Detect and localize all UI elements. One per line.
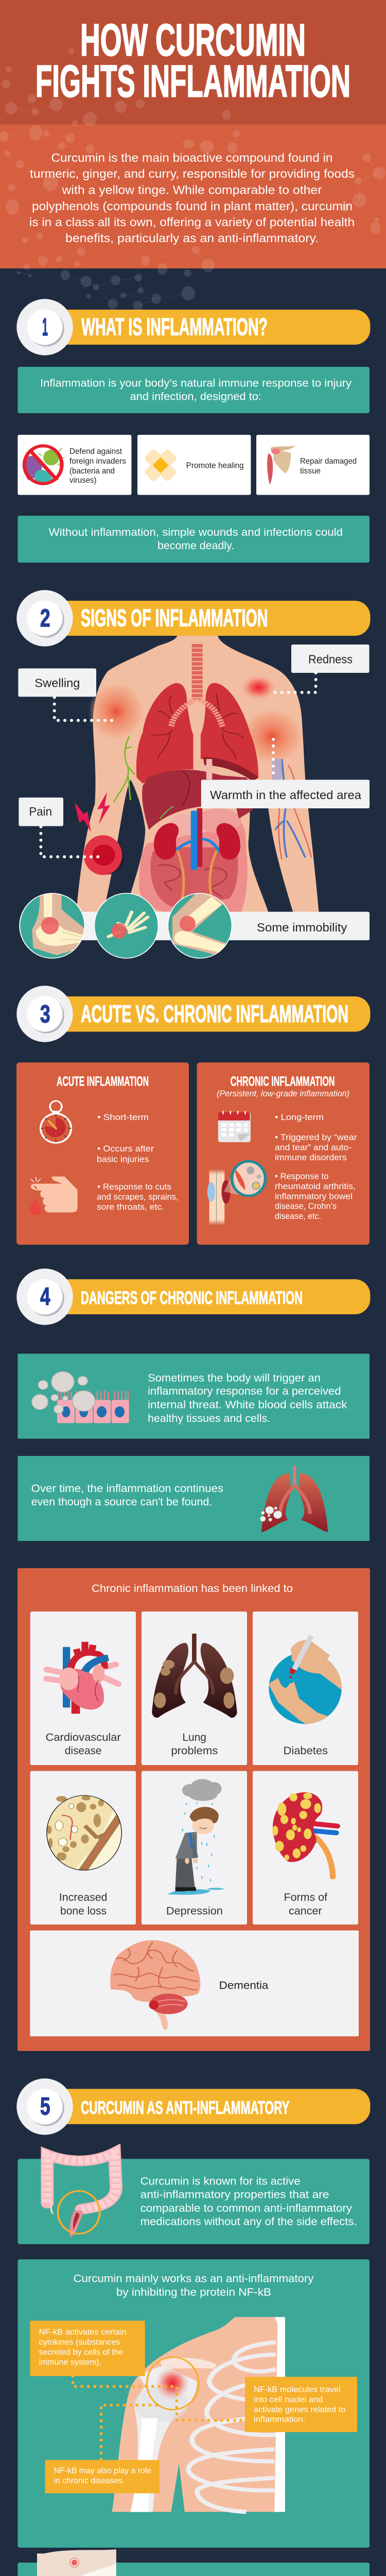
lightning bolts xyxy=(75,792,110,833)
callout: activates cytokines: secreted by cells of the xyxy=(39,2348,124,2357)
esophagus xyxy=(206,759,212,779)
stomach xyxy=(197,808,241,833)
arrows: dotted connectors xyxy=(73,2376,245,2460)
panel: without inflammation xyxy=(17,516,370,563)
callout: activates cytokines: immune system). xyxy=(39,2358,101,2367)
card: cardiovascular disease: disease xyxy=(65,1745,102,1757)
panel: inflammation definition: and infection, designed to: xyxy=(130,391,261,403)
section 5 header: 5 xyxy=(40,2093,50,2121)
panel: curcumin anti-inflammatory properties: comparable to common anti-inflammatory xyxy=(141,2202,353,2214)
panel: chronic inflammation: • Response to xyxy=(275,1172,328,1181)
label: pain xyxy=(19,798,63,826)
callout: chronic diseases: NF-kB may also play a role xyxy=(54,2466,151,2475)
icon: kidney tumor xyxy=(272,1792,337,1877)
panel: acute inflammation: sore throats, etc. xyxy=(97,1202,164,1212)
icon: calendar xyxy=(218,1111,251,1142)
card: forms of cancer: Forms of xyxy=(284,1891,327,1903)
intro text: polyphenols (compounds found in plant matter), curcumin xyxy=(32,199,353,213)
panel: chronic inflammation: • Long-term xyxy=(275,1113,324,1122)
card: increased bone loss xyxy=(30,1771,136,1925)
panel: enzymes xyxy=(17,2549,370,2576)
section 2 header: 2 xyxy=(40,605,50,632)
card: repair tissue: tissue xyxy=(300,467,321,476)
callout: cell nuclei: activate genes related to xyxy=(254,2405,346,2414)
card: depression: Depression xyxy=(166,1905,223,1917)
label: swelling: Swelling xyxy=(34,676,80,690)
section 2 header xyxy=(16,590,370,647)
lungs xyxy=(136,683,193,784)
card: cardiovascular disease xyxy=(30,1612,136,1765)
icon: sad man under rain xyxy=(167,1779,224,1895)
card: diabetes: Diabetes xyxy=(283,1745,328,1757)
icon: colon xyxy=(47,2153,116,2238)
card: increased bone loss: Increased xyxy=(59,1891,107,1903)
icon: bandage xyxy=(144,448,178,482)
callout: cell nuclei: into cell nuclei and xyxy=(254,2395,323,2404)
kidneys xyxy=(154,823,179,860)
card: increased bone loss: bone loss xyxy=(60,1905,107,1917)
warmth spot xyxy=(241,709,303,764)
card: repair tissue: Repair damaged xyxy=(300,457,357,466)
callout: chronic diseases xyxy=(45,2460,160,2493)
intro band xyxy=(0,125,386,268)
card: promote healing: Promote healing xyxy=(186,461,244,470)
arm veins xyxy=(276,759,305,858)
panel: chronic inflammation: • Triggered by “wear xyxy=(275,1133,357,1142)
intro text: benefits, particularly as an anti-inflammatory. xyxy=(65,231,319,245)
label: warmth xyxy=(201,780,370,808)
illustration: shoulder and rib cage xyxy=(112,2317,285,2512)
card: dementia xyxy=(30,1930,359,2036)
section 3 header xyxy=(16,986,370,1042)
label: pain: Pain xyxy=(29,805,52,818)
callout: cell nuclei: inflammation. xyxy=(254,2415,306,2424)
panel: inflammation continues: even though a source can't be found. xyxy=(31,1496,212,1508)
trachea xyxy=(186,644,208,700)
panel: acute inflammation: • Response to cuts xyxy=(97,1182,171,1192)
callout: activates cytokines xyxy=(30,2320,145,2376)
panel: acute inflammation: • Short-term xyxy=(97,1113,149,1122)
swelling spot xyxy=(89,683,144,740)
icon: white blood cells attacking xyxy=(32,1371,129,1423)
icon: inflamed lungs xyxy=(260,1466,328,1532)
intro text: is in a class all its own, offering a variety of potential health xyxy=(29,215,355,229)
panel: chronic inflammation: immune disorders xyxy=(275,1153,347,1162)
panel: NF-kB mechanism: Curcumin mainly works as an anti-inflammatory xyxy=(73,2273,314,2285)
panel: chronic inflammation linked conditions xyxy=(17,1568,370,2051)
panel: curcumin anti-inflammatory properties xyxy=(17,2153,370,2244)
molecule pattern: top xyxy=(0,48,385,311)
panel: inflammation continues: Over time, the inflammation continues xyxy=(31,1483,223,1495)
card: defend against invaders: (bacteria and xyxy=(69,467,115,476)
callout: cell nuclei: NF-kB molecules travel xyxy=(254,2385,341,2394)
card: diabetes xyxy=(253,1612,358,1765)
section 1 header xyxy=(16,299,370,355)
arrow: redness xyxy=(274,673,316,692)
intestines xyxy=(139,819,248,912)
panel: chronic inflammation: inflammatory bowel xyxy=(275,1192,353,1201)
panel: chronic inflammation: rheumatoid arthritis, xyxy=(275,1182,356,1191)
callout: activates cytokines: cytokines (substances xyxy=(39,2338,120,2347)
green nerve xyxy=(114,736,135,802)
card: forms of cancer xyxy=(253,1771,358,1925)
icon: ankle joint xyxy=(20,892,86,958)
section 4 header xyxy=(16,1268,370,1325)
intro text: turmeric, ginger, and curry, responsible for providing foods xyxy=(30,167,355,180)
card: dementia: Dementia xyxy=(219,1979,269,1991)
panel: chronic inflammation: disease, Crohn’s xyxy=(275,1201,337,1211)
label: redness: Redness xyxy=(308,652,353,666)
label: some immobility: Some immobility xyxy=(257,921,347,934)
icon: porous bone xyxy=(47,1795,126,1875)
label: redness xyxy=(291,645,370,673)
inflammation spot xyxy=(154,2366,190,2401)
icon: cut finger xyxy=(29,1177,78,1215)
section 3 header: 3 xyxy=(40,1001,50,1028)
icon: shoulder xyxy=(267,446,295,484)
illustration: human body with organs xyxy=(75,636,319,912)
panel: chronic inflammation xyxy=(197,1062,370,1245)
panel: inflammation continues xyxy=(17,1456,370,1541)
label: some immobility xyxy=(72,912,370,940)
title band xyxy=(0,0,386,125)
card: depression xyxy=(142,1771,247,1925)
redness spot xyxy=(239,674,278,701)
icon: wrist joint xyxy=(94,893,159,958)
ureters xyxy=(177,851,217,901)
panel: body attacks healthy tissue: inflammatory response for a perceived xyxy=(148,1385,341,1397)
panel: body attacks healthy tissue: internal threat. White blood cells attack xyxy=(148,1399,347,1411)
panel: body attacks healthy tissue: healthy tissues and cells. xyxy=(148,1413,270,1425)
intro text xyxy=(29,151,355,245)
panel: chronic inflammation linked conditions: Chronic inflammation has been linked to xyxy=(92,1583,293,1595)
panel: NF-kB mechanism: by inhibiting the protein NF-kB xyxy=(116,2286,271,2298)
icon: stopwatch xyxy=(41,1101,72,1143)
icon: knee inflammation xyxy=(207,1161,266,1225)
panel: body attacks healthy tissue: Sometimes the body will trigger an xyxy=(148,1372,321,1384)
card: lung problems: problems xyxy=(171,1745,218,1757)
pain spot xyxy=(89,838,124,875)
section 1 header: 1 xyxy=(42,314,48,341)
panel: curcumin anti-inflammatory properties: medications without any of the side effects. xyxy=(141,2216,357,2228)
card: cardiovascular disease: Cardiovascular xyxy=(45,1732,121,1743)
card: forms of cancer: cancer xyxy=(289,1905,322,1917)
label: warmth: Warmth in the affected area xyxy=(210,788,361,802)
icon: knee joint xyxy=(168,892,234,958)
panel: acute inflammation: and scrapes, sprains, xyxy=(97,1193,179,1202)
panel: acute inflammation: basic injuries xyxy=(97,1155,149,1164)
card: repair tissue xyxy=(256,435,370,495)
panel: curcumin anti-inflammatory properties: Curcumin is known for its active xyxy=(141,2175,301,2187)
icon: brain xyxy=(110,1940,200,2030)
card: defend against invaders: foreign invaders xyxy=(69,457,126,466)
arrow: warmth xyxy=(272,739,275,779)
card: promote healing xyxy=(137,435,251,495)
panel: chronic inflammation: and tear” and auto- xyxy=(275,1143,352,1152)
section 1 header: WHAT IS INFLAMMATION? xyxy=(81,313,268,340)
illustration: body with target point xyxy=(37,2549,116,2576)
panel: NF-kB mechanism xyxy=(17,2259,370,2548)
panel: without inflammation: become deadly. xyxy=(157,540,234,552)
card: defend against invaders xyxy=(17,435,131,495)
panel: inflammation definition: Inflammation is your body’s natural immune response to injury xyxy=(40,377,352,389)
panel: without inflammation: Without inflammation, simple wounds and infections could xyxy=(49,527,343,538)
panel: chronic inflammation: (Persistent, low-grade inflammation) xyxy=(217,1089,349,1098)
panel: acute inflammation: • Occurs after xyxy=(97,1144,154,1154)
intro text: Curcumin is the main bioactive compound found in xyxy=(51,151,332,164)
panel: chronic inflammation: disease, etc. xyxy=(275,1212,321,1221)
callout: chronic diseases: in chronic diseases. xyxy=(54,2477,125,2485)
icon: dark lungs xyxy=(152,1634,237,1718)
panel: body attacks healthy tissue xyxy=(17,1354,370,1438)
liver xyxy=(142,770,254,830)
title xyxy=(36,15,350,106)
panel: acute inflammation xyxy=(16,1062,189,1245)
icon: no microbes xyxy=(24,446,64,484)
arrow: pain xyxy=(41,827,102,857)
card: lung problems xyxy=(142,1612,247,1765)
panel: curcumin anti-inflammatory properties: anti-inflammatory properties that are xyxy=(141,2189,329,2201)
callout: cell nuclei xyxy=(245,2377,357,2432)
icon: blood sugar test xyxy=(268,1636,345,1729)
panel: inflammation definition xyxy=(17,367,370,413)
arrow: swelling xyxy=(55,698,116,720)
label: swelling xyxy=(18,668,96,697)
callout: activates cytokines: NF-kB activates certain xyxy=(39,2328,127,2337)
card: defend against invaders: viruses) xyxy=(69,476,97,485)
panel: acute inflammation: ACUTE INFLAMMATION xyxy=(57,1073,149,1089)
intro text: with a yellow tinge. While comparable to other xyxy=(61,183,322,197)
card: defend against invaders: Defend against xyxy=(69,447,122,456)
aorta and veins xyxy=(197,808,202,867)
card: lung problems: Lung xyxy=(182,1732,206,1743)
section 5 header xyxy=(16,2078,370,2135)
section 2 header: SIGNS OF INFLAMMATION xyxy=(81,604,268,632)
icon: heart xyxy=(47,1642,118,1714)
section 4 header: 4 xyxy=(40,1283,50,1311)
